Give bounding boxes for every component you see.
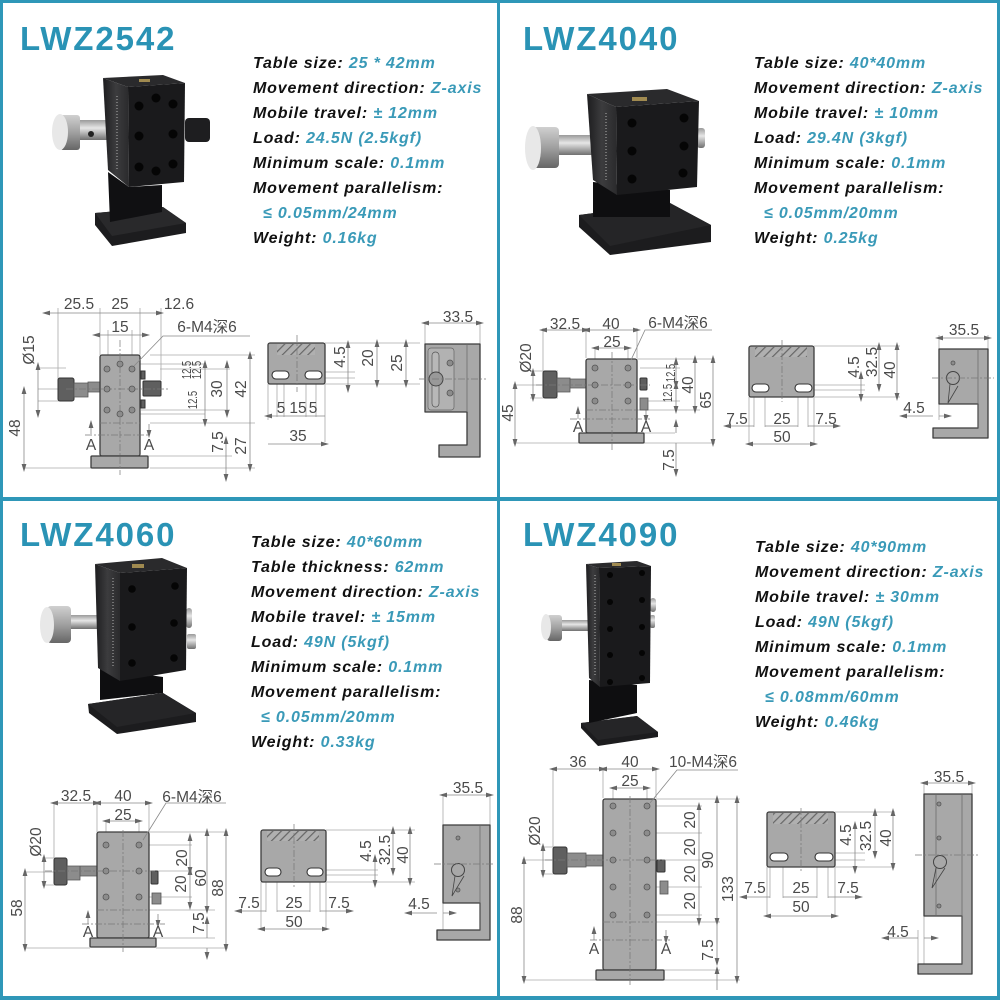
specifications: LWZ2542: Mobile travel: ± 12mm (253, 105, 438, 122)
drawing: LWZ4060 front view: 7.5 (191, 912, 208, 934)
specifications: LWZ2542: Minimum scale: 0.1mm (253, 155, 445, 172)
drawing: LWZ4040 side view (903, 322, 994, 438)
drawing: LWZ4060 front view: 32.5 (61, 788, 91, 805)
drawing: LWZ4040 front view: 65 (698, 391, 715, 409)
specifications: LWZ4090: Weight: 0.46kg (755, 714, 880, 731)
drawing: LWZ4060 plate view: 7.5 (328, 895, 350, 912)
drawing: LWZ4040 plate view: 25 (773, 411, 791, 428)
drawing: LWZ4060 front view: 25 (114, 807, 132, 824)
drawing: LWZ4090 front view (509, 753, 740, 990)
drawing: LWZ4090 front view: 88 (509, 906, 526, 924)
drawing: LWZ4090 front view: 133 (720, 876, 737, 902)
drawing: LWZ4090 front view: 90 (700, 851, 717, 869)
specifications: LWZ4090: Mobile travel: ± 30mm (755, 589, 940, 606)
drawing: LWZ4040 side view: 4.5 (903, 400, 925, 417)
drawing: LWZ4060 front view (9, 788, 228, 956)
drawing: LWZ2542 front view: 25.5 (64, 296, 94, 313)
drawing: LWZ4090 plate view: 7.5 (837, 880, 859, 897)
drawing: LWZ2542 front view: 12.5 (181, 361, 194, 379)
specifications: LWZ4040: Weight: 0.25kg (754, 230, 879, 247)
drawing: LWZ4060 plate view: 7.5 (238, 895, 260, 912)
drawing: LWZ4060 front view: A (83, 924, 94, 941)
drawing: LWZ2542 side view (419, 309, 486, 457)
drawing: LWZ2542 plate view: 20 (360, 349, 377, 367)
drawing: LWZ4090 front view: 10-M4深6 (669, 753, 737, 771)
panel: LWZ4040 (500, 20, 994, 473)
specifications: LWZ4090 (755, 539, 984, 731)
specifications: LWZ4040: Movement parallelism: (754, 180, 944, 197)
specifications: LWZ4090: ≤ 0.08mm/60mm (765, 689, 900, 706)
drawing: LWZ4090 front view: 25 (621, 773, 639, 790)
panel: LWZ2542 (7, 20, 486, 478)
specifications: LWZ4090: Movement direction: Z-axis (755, 564, 984, 581)
drawing: LWZ4040 front view: 12.5 (662, 384, 675, 402)
title: LWZ4090: LWZ4090 (523, 516, 679, 553)
drawing: LWZ4040 plate view (726, 340, 900, 446)
drawing: LWZ2542 front view: 6-M4深6 (177, 318, 237, 336)
drawing: LWZ2542 front view: 12.6 (164, 296, 194, 313)
drawing: LWZ4040 plate view: 50 (773, 429, 791, 446)
drawing: LWZ4090 plate view (743, 808, 895, 917)
specifications: LWZ4060: Weight: 0.33kg (251, 734, 376, 751)
title: LWZ4060: LWZ4060 (20, 516, 176, 553)
drawing: LWZ2542 front view: 15 (111, 319, 129, 336)
drawing: LWZ4090 plate view: 50 (792, 899, 810, 916)
drawing: LWZ4090 front view: 20 (682, 811, 699, 829)
title: LWZ2542: LWZ2542 (20, 20, 176, 57)
photo: LWZ4060 stage (40, 558, 196, 734)
drawing: LWZ2542 plate view: 4.5 (332, 346, 349, 368)
drawing: LWZ4040 side view: 35.5 (949, 322, 979, 339)
specifications: LWZ4060: Movement direction: Z-axis (251, 584, 480, 601)
drawing: LWZ2542 front view: 12.5 (187, 391, 200, 409)
specifications: LWZ4060: Minimum scale: 0.1mm (251, 659, 443, 676)
specifications: LWZ4090: Movement parallelism: (755, 664, 945, 681)
drawing: LWZ4060 front view: 6-M4深6 (162, 788, 222, 806)
specifications: LWZ4060: Load: 49N (5kgf) (251, 634, 390, 651)
drawing: LWZ4040 front view: 25 (603, 334, 621, 351)
drawing: LWZ4090 plate view: 25 (792, 880, 810, 897)
drawing: LWZ4040 plate view: 32.5 (864, 347, 881, 377)
specifications: LWZ4090: Table size: 40*90mm (755, 539, 927, 556)
drawing: LWZ2542 front view: 48 (7, 419, 24, 437)
drawing: LWZ2542 front view: 27 (233, 437, 250, 455)
drawing: LWZ4090 side view (885, 769, 980, 974)
drawing: LWZ2542 front view (7, 296, 255, 478)
drawing: LWZ2542 plate view: 15 (289, 400, 307, 417)
drawing: LWZ4090 side view: 4.5 (887, 924, 909, 941)
drawing: LWZ4040 front view (500, 314, 715, 473)
specifications: LWZ4040: Mobile travel: ± 10mm (754, 105, 939, 122)
drawing: LWZ2542 front view: 12.5 (191, 361, 204, 379)
panel: LWZ4060 (9, 516, 494, 956)
specifications: LWZ4090: Load: 49N (5kgf) (755, 614, 894, 631)
photo: LWZ2542 stage (52, 75, 210, 246)
drawing: LWZ2542 front view: 25 (111, 296, 129, 313)
drawing: LWZ4060 plate view: 50 (285, 914, 303, 931)
drawing: LWZ2542 front view: 7.5 (210, 431, 227, 453)
drawing: LWZ4060 front view: A (153, 924, 164, 941)
drawing: LWZ2542 plate view: 35 (289, 428, 307, 445)
specifications: LWZ2542: ≤ 0.05mm/24mm (263, 205, 398, 222)
specifications: LWZ4090: Minimum scale: 0.1mm (755, 639, 947, 656)
photo: LWZ4090 stage (541, 561, 658, 746)
drawing: LWZ4060 side view: 35.5 (453, 780, 483, 797)
drawing: LWZ4090 front view: 20 (682, 838, 699, 856)
drawing: LWZ4090 plate view: 32.5 (858, 821, 875, 851)
title: LWZ4040: LWZ4040 (523, 20, 679, 57)
drawing: LWZ4090 front view: 20 (682, 865, 699, 883)
drawing: LWZ2542 front view: A (86, 437, 97, 454)
drawing: LWZ4090 side view: 35.5 (934, 769, 964, 786)
drawing: LWZ4060 plate view: 25 (285, 895, 303, 912)
drawing: LWZ4040 front view: 7.5 (661, 449, 678, 471)
drawing: LWZ4090 front view: Ø20 (527, 816, 544, 846)
specifications: LWZ4040: Load: 29.4N (3kgf) (754, 130, 908, 147)
drawing: LWZ4060 plate view (238, 824, 415, 931)
drawing: LWZ4060 front view: 20 (174, 849, 191, 867)
photo: LWZ4040 stage (525, 89, 711, 255)
drawing: LWZ4060 plate view: 40 (395, 846, 412, 864)
drawing: LWZ2542 plate view (268, 335, 420, 445)
specifications: LWZ4060: Movement parallelism: (251, 684, 441, 701)
drawing: LWZ2542 front view: 42 (233, 380, 250, 398)
drawing: LWZ4040 front view: A (573, 419, 584, 436)
drawing: LWZ4090 front view: A (661, 941, 672, 958)
drawing: LWZ2542 plate view: 25 (389, 354, 406, 372)
drawing: LWZ2542 front view: A (144, 437, 155, 454)
drawing: LWZ4090 front view: 40 (621, 754, 639, 771)
drawing: LWZ4040 front view: 40 (602, 316, 620, 333)
drawing: LWZ4090 plate view: 7.5 (744, 880, 766, 897)
drawing: LWZ2542 side view: 33.5 (443, 309, 473, 326)
specifications: LWZ2542: Load: 24.5N (2.5kgf) (253, 130, 422, 147)
drawing: LWZ4060 front view: 20 (173, 875, 190, 893)
drawing: LWZ4040 front view: 32.5 (550, 316, 580, 333)
drawing: LWZ4040 front view: 40 (680, 376, 697, 394)
drawing: LWZ4060 front view: 60 (193, 869, 210, 887)
drawing: LWZ4040 front view: A (641, 419, 652, 436)
drawing: LWZ2542 plate view: 5 (277, 400, 285, 417)
drawing: LWZ4060 plate view: 32.5 (377, 835, 394, 865)
drawing: LWZ4040 plate view: 40 (882, 361, 899, 379)
drawing: LWZ4060 front view: 88 (210, 879, 227, 897)
drawing: LWZ4090 front view: A (589, 941, 600, 958)
specifications: LWZ2542: Weight: 0.16kg (253, 230, 378, 247)
drawing: LWZ4060 front view: Ø20 (28, 827, 45, 857)
drawing: LWZ4090 plate view: 4.5 (838, 824, 855, 846)
specifications: LWZ4060: Mobile travel: ± 15mm (251, 609, 436, 626)
drawing: LWZ4090 front view: 36 (569, 754, 587, 771)
specifications: LWZ4040: ≤ 0.05mm/20mm (764, 205, 899, 222)
drawing: LWZ4090 front view: 20 (682, 892, 699, 910)
drawing: LWZ4060 side view (408, 780, 494, 940)
specifications: LWZ4040: Minimum scale: 0.1mm (754, 155, 946, 172)
specifications: LWZ4060: Table size: 40*60mm (251, 534, 423, 551)
specifications: LWZ2542: Movement direction: Z-axis (253, 80, 482, 97)
drawing: LWZ4040 plate view: 4.5 (846, 356, 863, 378)
drawing: LWZ4040 front view: 6-M4深6 (648, 314, 708, 332)
drawing: LWZ2542 front view: 30 (209, 380, 226, 398)
specifications: LWZ2542 (253, 55, 482, 247)
drawing: LWZ4040 front view: 12.5 (665, 364, 678, 382)
drawing: LWZ4090 plate view: 40 (878, 829, 895, 847)
specifications: LWZ4040: Movement direction: Z-axis (754, 80, 983, 97)
specifications: LWZ4040: Table size: 40*40mm (754, 55, 926, 72)
specifications: LWZ2542: Movement parallelism: (253, 180, 443, 197)
drawing: LWZ2542 plate view: 5 (309, 400, 317, 417)
drawing: LWZ2542 front view: Ø15 (21, 335, 38, 365)
drawing: LWZ4060 plate view: 4.5 (358, 840, 375, 862)
drawing: LWZ4060 side view: 4.5 (408, 896, 430, 913)
drawing: LWZ4040 plate view: 7.5 (726, 411, 748, 428)
drawing: LWZ4040 front view: 45 (500, 404, 517, 422)
specifications: LWZ4060 (251, 534, 480, 751)
drawing: LWZ4060 front view: 40 (114, 788, 132, 805)
drawing: LWZ4040 front view: Ø20 (518, 343, 535, 373)
drawing: LWZ4060 front view: 58 (9, 899, 26, 917)
specifications: LWZ2542: Table size: 25 * 42mm (253, 55, 436, 72)
drawing: LWZ4090 front view: 7.5 (700, 939, 717, 961)
drawing: LWZ4040 plate view: 7.5 (815, 411, 837, 428)
specifications: LWZ4060: ≤ 0.05mm/20mm (261, 709, 396, 726)
specifications: LWZ4060: Table thickness: 62mm (251, 559, 444, 576)
panel: LWZ4090 (509, 516, 984, 990)
specifications: LWZ4040 (754, 55, 983, 247)
